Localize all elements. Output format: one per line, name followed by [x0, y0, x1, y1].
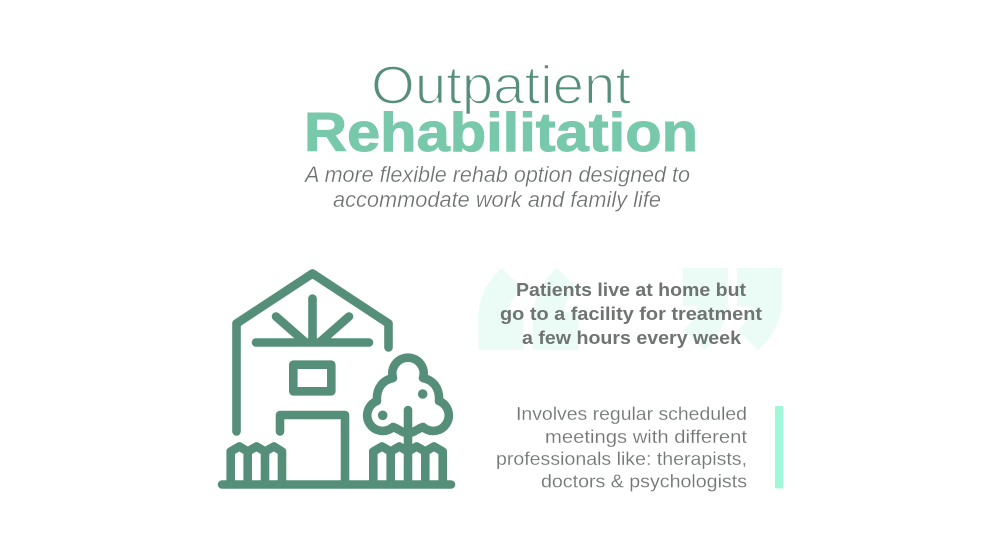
quotation marks background: [478, 268, 782, 350]
ground: [222, 480, 451, 489]
left quote mark: [478, 268, 578, 350]
title line: Outpatient: Outpatient: [371, 56, 631, 116]
accent bar: [775, 406, 783, 488]
callout: key statement: go to a facility for treatment: [500, 303, 762, 324]
attic window with spokes: [256, 298, 369, 342]
text block: details: professionals like: therapists,: [496, 449, 747, 469]
door: [280, 415, 345, 484]
text block: details: meetings with different: [545, 427, 747, 447]
tree trunk: [404, 410, 412, 447]
window: [293, 365, 331, 391]
title line: Rehabilitation: Rehabilitation: [304, 101, 698, 163]
tree fruit: [378, 389, 428, 420]
icon: house with tree and fences: [222, 274, 451, 484]
subtitle: [303, 162, 690, 212]
left fence: [231, 446, 282, 484]
callout: key statement: a few hours every week: [522, 327, 742, 348]
text block: details: [496, 404, 747, 492]
tree crown: [367, 358, 449, 433]
title: [304, 56, 698, 163]
callout: key statement: [500, 279, 762, 348]
text block: details: doctors & psychologists: [541, 472, 747, 492]
text block: details: Involves regular scheduled: [516, 404, 747, 424]
subtitle: A more flexible rehab option designed to: [303, 162, 690, 187]
right fence: [373, 446, 443, 484]
house outline: [236, 274, 388, 432]
subtitle: accommodate work and family life: [333, 187, 661, 212]
callout: key statement: Patients live at home but: [516, 279, 746, 300]
right quote mark: [683, 268, 782, 350]
